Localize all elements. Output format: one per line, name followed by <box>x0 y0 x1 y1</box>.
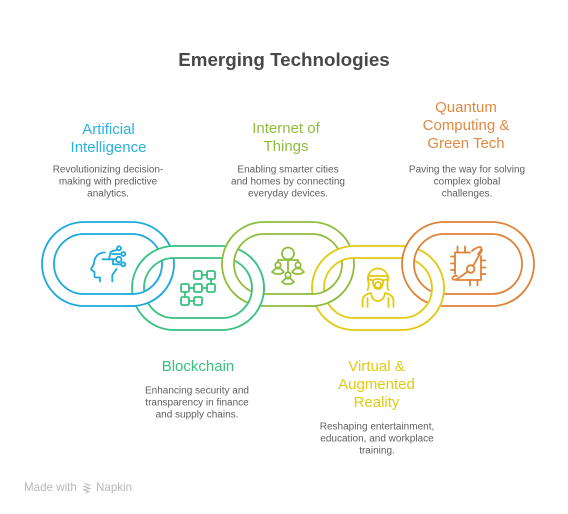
text block: Blockchain: and supply chains. <box>156 410 238 420</box>
text block: Quantum Computing and Green Tech <box>409 99 525 200</box>
icon: person with VR headset <box>362 268 394 307</box>
text block: Artificial Intelligence <box>53 121 163 200</box>
text block: Virtual and Augmented Reality <box>320 358 434 456</box>
text block: Virtual and Augmented Reality: Virtual & <box>348 358 405 375</box>
text block: Internet of Things: Internet of <box>252 120 321 137</box>
footer: made with Napkin: Made with <box>24 481 77 494</box>
text block: Blockchain: Enhancing security and <box>145 386 249 396</box>
icon: connected people network <box>272 248 304 284</box>
text block: Quantum Computing and Green Tech: Paving the way for solving <box>409 164 525 176</box>
text block: Quantum Computing and Green Tech: Computing & <box>423 117 509 134</box>
weave overlap: green over olive <box>238 272 265 312</box>
text block: Quantum Computing and Green Tech: challenges. <box>442 188 492 200</box>
link: Artificial Intelligence <box>42 222 174 306</box>
text block: Internet of Things: everyday devices. <box>248 188 328 200</box>
weave overlap: blue over green <box>125 272 174 307</box>
title: Emerging Technologies <box>178 49 390 70</box>
text block: Virtual and Augmented Reality: education, and workplace <box>320 434 434 444</box>
text block: Virtual and Augmented Reality: Augmented <box>338 376 415 393</box>
icon: AI head with circuit <box>91 246 125 282</box>
link: Internet of Things <box>222 222 354 306</box>
text block: Artificial Intelligence: Revolutionizing decision- <box>53 164 163 176</box>
icon: Napkin logo <box>82 482 92 494</box>
text block: Virtual and Augmented Reality: Reality <box>354 394 400 411</box>
text block: Blockchain: transparency in finance <box>145 398 249 408</box>
link: Virtual and Augmented Reality <box>312 246 444 330</box>
text block: Blockchain: Blockchain <box>162 358 234 375</box>
text block: Artificial Intelligence: analytics. <box>87 188 129 200</box>
footer: made with Napkin: Napkin <box>96 481 132 494</box>
chain of interlocking links <box>42 222 534 330</box>
text block: Quantum Computing and Green Tech: complex global <box>434 176 500 188</box>
text block: Blockchain <box>145 358 249 420</box>
text block: Artificial Intelligence: Artificial <box>82 121 135 138</box>
text block: Virtual and Augmented Reality: Reshaping entertainment, <box>320 422 434 432</box>
text block: Quantum Computing and Green Tech: Quantum <box>435 99 497 116</box>
text block: Virtual and Augmented Reality: training. <box>359 446 395 456</box>
text block: Internet of Things <box>231 120 345 200</box>
text block: Quantum Computing and Green Tech: Green Tech <box>427 135 505 152</box>
text block: Internet of Things: Enabling smarter cities <box>237 164 339 176</box>
weave overlap: olive over yellow <box>305 272 354 307</box>
link: Blockchain <box>132 246 264 330</box>
text block: Internet of Things: Things <box>263 138 309 155</box>
icon: blockchain blocks <box>181 271 215 305</box>
icon: chip with orbit <box>451 246 486 286</box>
text block: Artificial Intelligence: Intelligence <box>71 139 146 156</box>
footer: made with Napkin <box>24 481 132 494</box>
text block: Artificial Intelligence: making with predictive <box>59 176 158 188</box>
text block: Internet of Things: and homes by connecting <box>231 176 345 188</box>
link: Quantum Computing and Green Tech <box>402 222 534 306</box>
weave overlap: yellow over orange <box>418 272 445 312</box>
